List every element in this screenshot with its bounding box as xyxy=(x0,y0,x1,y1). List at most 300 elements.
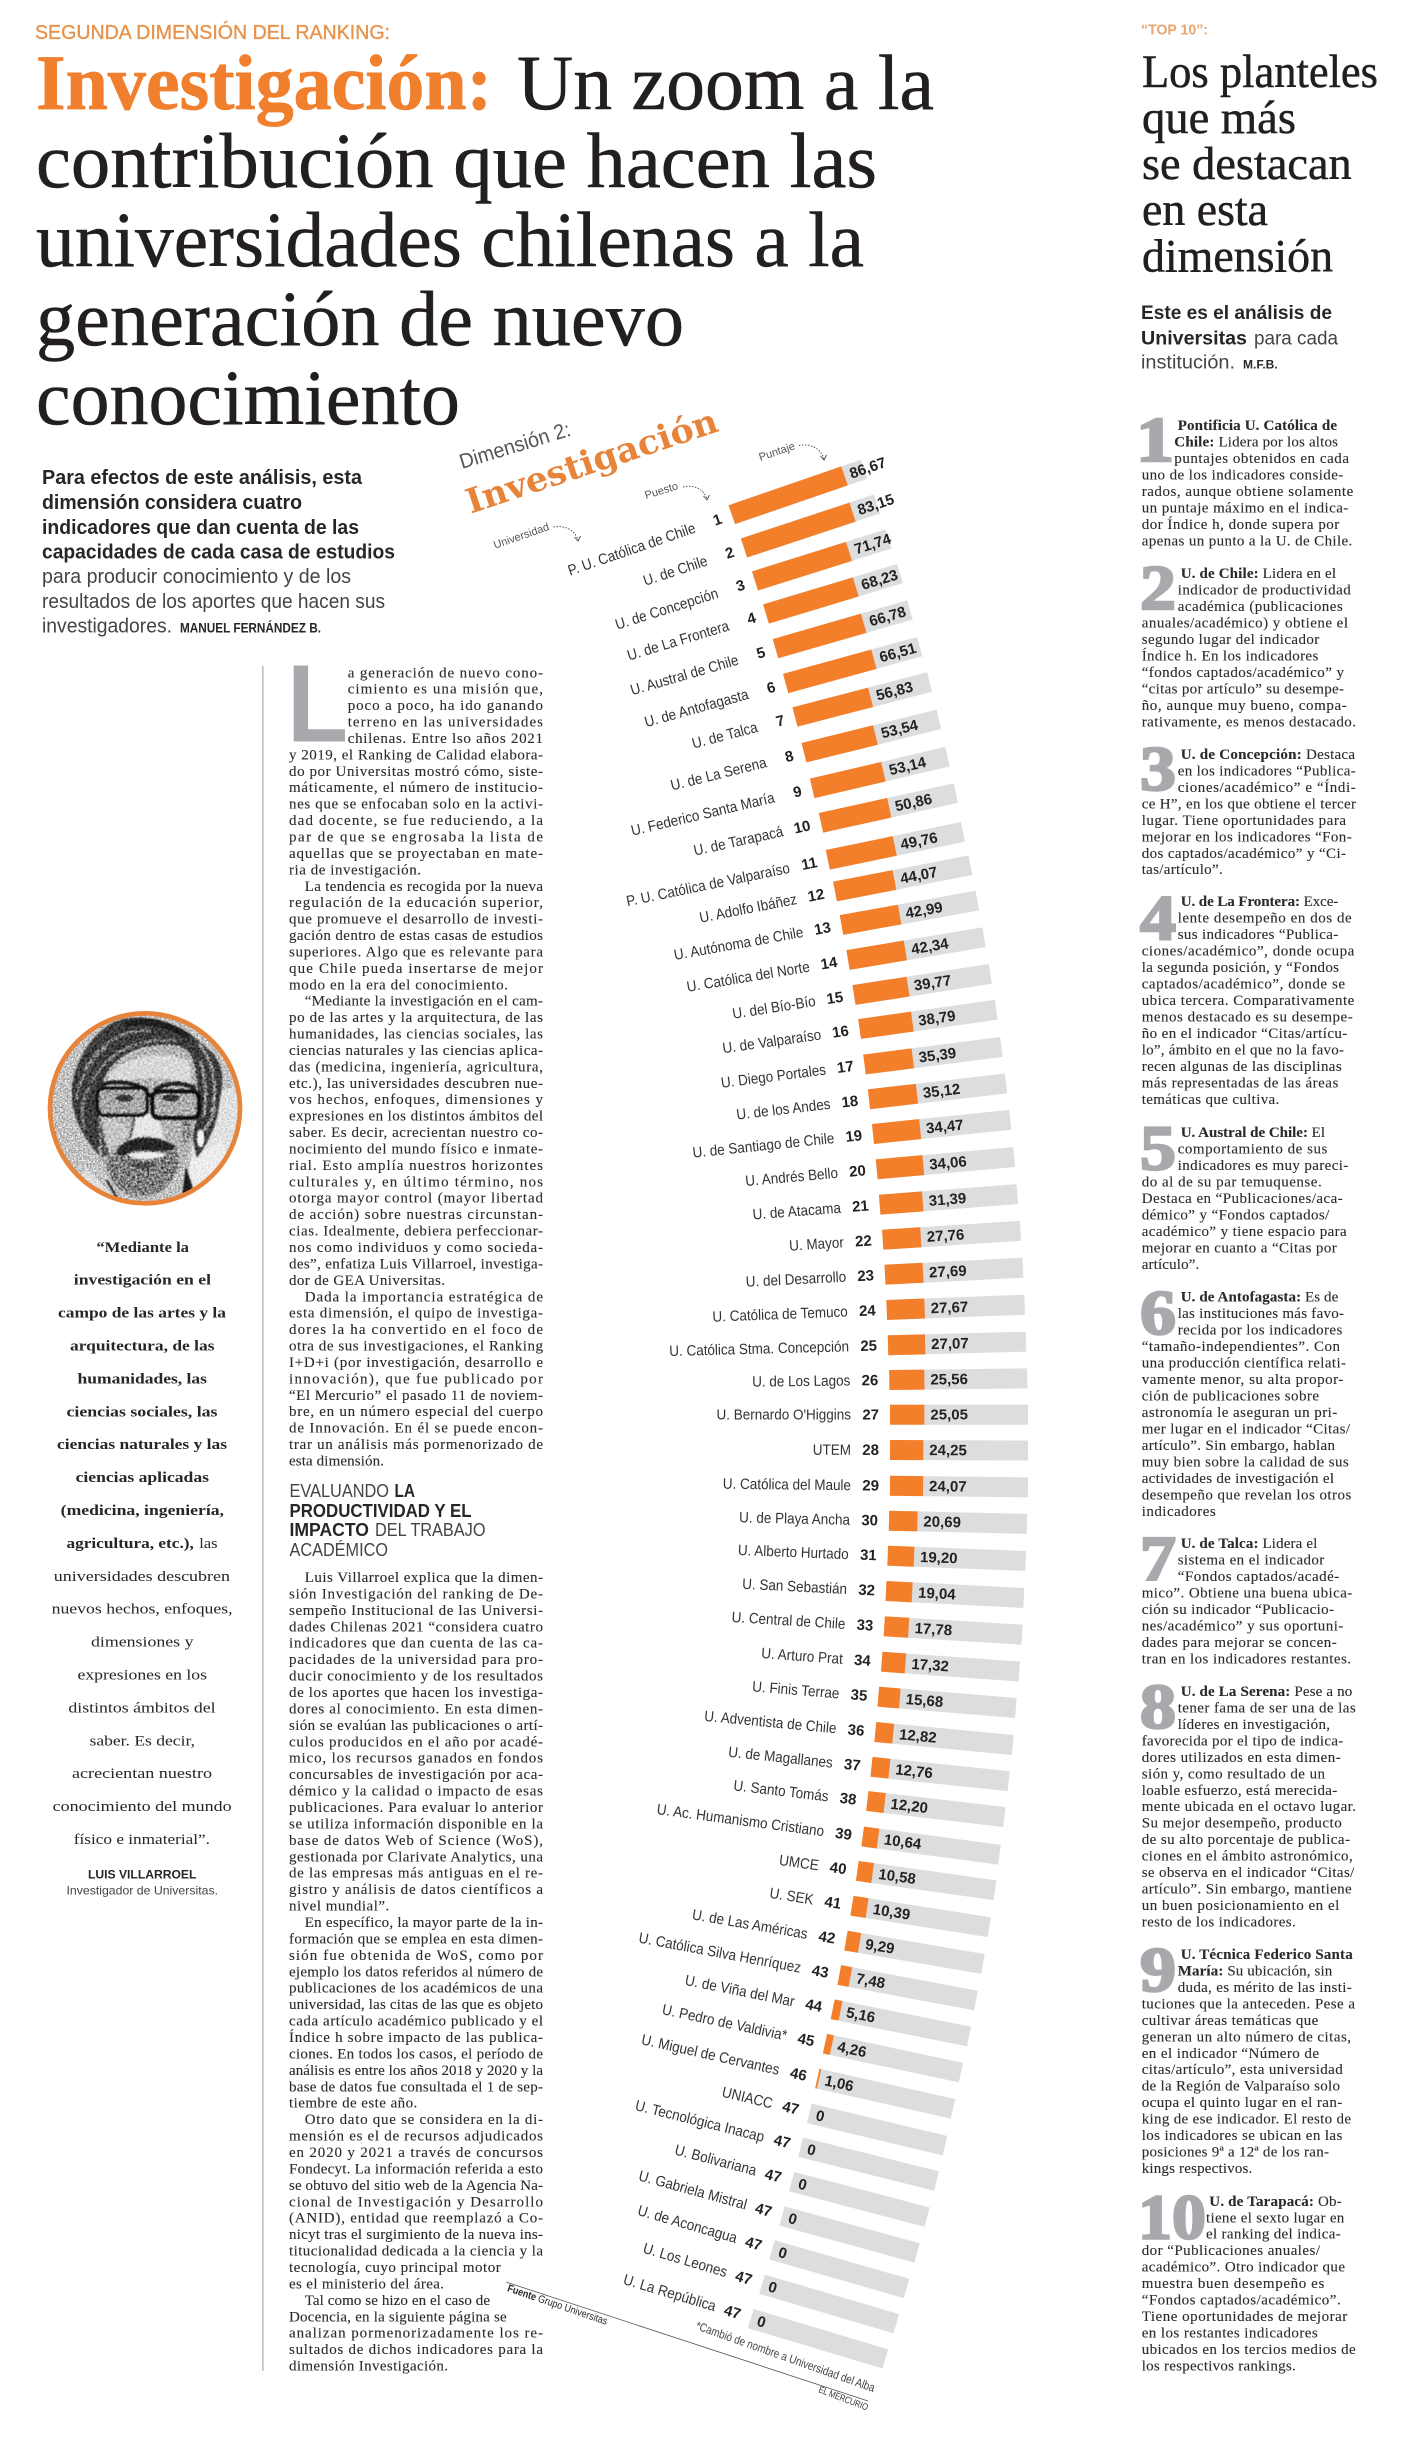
item 3: lugar. Tiene oportunidades para xyxy=(1142,813,1346,829)
item 10: muestra buen desempeño es xyxy=(1142,2276,1324,2292)
row 26 xyxy=(752,1368,1027,1392)
quote attribution: LUIS VILLARROEL xyxy=(88,1867,196,1881)
row 16: U. de Valparaíso xyxy=(721,1027,822,1057)
row 4: 4 xyxy=(745,609,759,628)
row 28: UTEM xyxy=(813,1442,851,1459)
row 20: 34,06 xyxy=(929,1153,967,1174)
item 5: comportamiento de sus xyxy=(1178,1142,1327,1158)
pull quote: nuevos hechos, enfoques, xyxy=(52,1602,233,1618)
row 34: U. Arturo Prat xyxy=(761,1645,843,1668)
row 9: 9 xyxy=(792,783,804,802)
row 8: U. de La Serena xyxy=(669,755,768,795)
row 12: U. Adolfo Ibáñez xyxy=(698,891,798,927)
article text: modo en la era del conocimiento. xyxy=(289,977,508,993)
article text continued: pacidades de la universidad para pro- xyxy=(289,1652,543,1668)
item 4: U. de La Frontera: Exce- xyxy=(1181,894,1338,910)
article text: Dada la importancia estratégica de xyxy=(305,1289,543,1305)
row 2: U. de Chile xyxy=(641,553,710,590)
row 39 xyxy=(656,1799,1001,1865)
row 27: 27 xyxy=(862,1407,879,1424)
item 2: “citas por artículo” su desempe- xyxy=(1142,682,1344,698)
article text: a generación de nuevo cono- xyxy=(348,665,543,681)
row 19: 19 xyxy=(845,1127,863,1146)
item 8: líderes en investigación, xyxy=(1178,1717,1330,1733)
article text: La tendencia es recogida por la nueva xyxy=(305,879,543,895)
row 38 xyxy=(732,1775,1006,1827)
item 3: mejorar en los indicadores “Fon- xyxy=(1142,830,1352,846)
row 34: 17,32 xyxy=(911,1656,949,1675)
item 8: se observa en el indicador “Citas/ xyxy=(1142,1865,1355,1881)
row 17: U. Diego Portales xyxy=(720,1062,827,1092)
row 44: 5,16 xyxy=(845,2004,877,2027)
chart axis captions and arrows: Puesto xyxy=(643,480,680,502)
article text continued: indicadores que dan cuenta de las ca- xyxy=(289,1636,543,1652)
row 30: 20,69 xyxy=(923,1513,961,1531)
item 7: ción su indicador “Publicacio- xyxy=(1142,1602,1334,1618)
row 27: U. Bernardo O'Higgins xyxy=(717,1407,851,1424)
article text: rial. Esto amplía nuestros horizontes xyxy=(289,1158,543,1174)
article text: culturales y, en último término, nos xyxy=(289,1174,543,1190)
item 6: astronomía le aseguran un pri- xyxy=(1142,1405,1337,1421)
article text: “Mediante la investigación en el cam- xyxy=(305,994,543,1010)
item 1: puntajes obtenidos en cada xyxy=(1174,451,1349,467)
row 5: U. Austral de Chile xyxy=(629,652,741,699)
item 9: ocupa el quinto lugar en el ran- xyxy=(1142,2095,1342,2111)
item 1: uno de los indicadores conside- xyxy=(1142,468,1343,484)
item 6: las instituciones más favo- xyxy=(1178,1306,1344,1322)
row 47 Inacap xyxy=(633,2096,939,2191)
row 47 UNIACC: 47 xyxy=(781,2098,801,2119)
row 44 xyxy=(683,1970,971,2046)
row 22: 22 xyxy=(855,1232,872,1250)
row 45: 4,26 xyxy=(836,2039,868,2061)
item 4: recen algunas de las disciplinas xyxy=(1142,1059,1342,1075)
article text: ria de investigación. xyxy=(289,862,421,878)
row 17: 35,39 xyxy=(918,1045,957,1066)
row 34: 34 xyxy=(853,1652,872,1670)
pull quote: “Mediante la xyxy=(96,1240,190,1256)
article text continued: ejemplo los datos referidos al número de xyxy=(289,1964,543,1980)
article text: terreno en las universidades xyxy=(348,715,543,731)
row 42 xyxy=(691,1904,985,1974)
row 19: 34,47 xyxy=(925,1117,964,1137)
article text: otra de sus investigaciones, el Ranking xyxy=(289,1338,544,1354)
item 9: tuciones que la anteceden. Pese a xyxy=(1142,1996,1355,2012)
item 7: nes/académico” y sus oportuni- xyxy=(1142,1618,1343,1634)
intro text: investigadores. xyxy=(42,616,172,638)
item 2: “fondos captados/académico” y xyxy=(1142,665,1344,681)
row 25: U. Católica Stma. Concepción xyxy=(669,1339,849,1360)
row 47 UNIACC xyxy=(720,2083,947,2155)
row 10: 10 xyxy=(792,817,812,838)
row 47 La República: U. La República xyxy=(621,2272,718,2315)
item 8: 8 xyxy=(1140,1671,1176,1742)
row 32: 19,04 xyxy=(918,1585,957,1604)
sidebar heading: se destacan xyxy=(1142,138,1352,190)
row 40: UMCE xyxy=(778,1852,820,1875)
row 17 xyxy=(720,1037,1003,1093)
item 2: segundo lugar del indicador xyxy=(1142,632,1319,648)
row 20 xyxy=(744,1147,1015,1191)
row 10: U. de Tarapacá xyxy=(692,824,785,860)
article text continued xyxy=(289,1570,543,2375)
item 8 xyxy=(1140,1671,1356,1930)
row 12: 12 xyxy=(806,886,826,906)
row 11: P. U. Católica de Valparaíso xyxy=(625,860,792,911)
title: conocimiento xyxy=(36,354,460,441)
row 5 xyxy=(628,600,913,700)
row 28: 24,25 xyxy=(929,1442,967,1459)
intro text: dimensión considera cuatro xyxy=(42,492,302,514)
intro text xyxy=(42,467,395,638)
row 4 xyxy=(625,564,903,665)
row 41: 10,39 xyxy=(872,1901,911,1924)
row 38: 12,20 xyxy=(890,1796,929,1817)
article text continued: dimensión Investigación. xyxy=(289,2359,448,2375)
item 4: menos destacado es su desempe- xyxy=(1142,1010,1353,1026)
row 11 xyxy=(624,822,965,911)
row 43: U. Católica Silva Henríquez xyxy=(637,1930,802,1977)
sidebar heading: dimensión xyxy=(1142,230,1333,282)
row 37 xyxy=(727,1742,1010,1791)
item 8: tener fama de ser una de las xyxy=(1178,1700,1356,1716)
chart footer xyxy=(506,2282,877,2413)
article text continued: Luis Villarroel explica que la dimen- xyxy=(305,1570,543,1586)
item 5: artículo”. xyxy=(1142,1257,1199,1273)
subheading: LA xyxy=(394,1481,415,1501)
item 6: ción de publicaciones sobre xyxy=(1142,1388,1319,1404)
item 6: “tamaño-independientes”. Con xyxy=(1142,1339,1340,1355)
item 9: de la Región de Valparaíso solo xyxy=(1142,2079,1340,2095)
row 39: U. Ac. Humanismo Cristiano xyxy=(656,1801,825,1840)
row 33 xyxy=(731,1607,1023,1645)
item 2: ño, aunque muy bueno, compa- xyxy=(1142,698,1347,714)
item 10: dor “Publicaciones anuales/ xyxy=(1142,2243,1321,2259)
row 45: U. Pedro de Valdivia* xyxy=(661,2002,789,2045)
item 10: “Fondos captados/académico”. xyxy=(1142,2292,1341,2308)
item 5: indicadores es muy pareci- xyxy=(1178,1158,1348,1174)
item 4: lo”, ámbito en el que no la favo- xyxy=(1142,1042,1344,1058)
row 35: 15,68 xyxy=(905,1691,944,1711)
row 7: 56,83 xyxy=(874,679,915,705)
drop cap L: L xyxy=(287,642,348,766)
row 41: 41 xyxy=(823,1894,842,1913)
article text continued: analizan pormenorizadamente los re- xyxy=(289,2326,543,2342)
row 21: 21 xyxy=(851,1198,869,1216)
article text: dores la ha convertido en el foco de xyxy=(289,1322,543,1338)
row 11: 11 xyxy=(800,854,819,874)
row 37: 37 xyxy=(843,1756,861,1775)
chart axis captions and arrows: Puntaje xyxy=(757,440,797,464)
row 26: U. de Los Lagos xyxy=(752,1373,850,1391)
article text continued: gistro y análisis de datos científicos a xyxy=(289,1882,543,1898)
article text continued: cional de Investigación y Desarrollo xyxy=(289,2194,543,2210)
item 10: 10 xyxy=(1138,2182,1206,2253)
row 2: 2 xyxy=(723,544,736,563)
item 6: 6 xyxy=(1140,1277,1176,1348)
row 47 Gabriela Mistral: U. Gabriela Mistral xyxy=(637,2168,749,2214)
row 8 xyxy=(668,710,941,795)
item 10: Tiene oportunidades de mejorar xyxy=(1142,2309,1347,2325)
item 10: tiene el sexto lugar en xyxy=(1206,2210,1345,2226)
item 7 xyxy=(1140,1523,1352,1668)
item 4: lente desempeño en dos de xyxy=(1178,910,1352,926)
pull quote: expresiones en los xyxy=(78,1668,207,1684)
row 35 xyxy=(751,1676,1017,1718)
quote attribution xyxy=(66,1867,218,1898)
row 20: 20 xyxy=(848,1162,867,1181)
intro text: resultados de los aportes que hacen sus xyxy=(42,591,385,613)
title: universidades chilenas a la xyxy=(36,196,864,283)
row 13: 42,99 xyxy=(904,899,944,922)
row 47 Gabriela Mistral: 0 xyxy=(786,2210,799,2229)
item 8: un buen posicionamiento en el xyxy=(1142,1898,1339,1914)
item 9: 9 xyxy=(1140,1934,1176,2005)
row 37: 12,76 xyxy=(894,1761,934,1782)
item 9: king de ese indicador. El resto de xyxy=(1142,2112,1351,2128)
article text continued: de las empresas más antiguas en el re- xyxy=(289,1866,543,1882)
item 6: U. de Antofagasta: Es de xyxy=(1181,1290,1339,1306)
item 10: los respectivos rankings. xyxy=(1142,2358,1296,2374)
article text: cias. Idealmente, debiera perfeccionar- xyxy=(289,1224,543,1240)
article text continued: base de datos Web of Science (WoS), xyxy=(289,1833,543,1849)
item 1: rados, aunque obtiene solamente xyxy=(1142,484,1354,500)
row 33: 33 xyxy=(856,1617,874,1635)
article text: saber. Es decir, acrecientan nuestro co- xyxy=(289,1125,543,1141)
bar chart: ranking xyxy=(565,452,1028,2369)
row 47 Aconcagua: 47 xyxy=(743,2234,764,2255)
row 6: 66,51 xyxy=(878,640,918,666)
subheading: DEL TRABAJO xyxy=(375,1520,486,1540)
title xyxy=(36,39,934,441)
item 1: Chile: Lidera por los altos xyxy=(1174,435,1338,451)
article text continued: gestionada por Clarivate Analytics, una xyxy=(289,1849,543,1865)
subheading: ACADÉMICO xyxy=(290,1540,388,1560)
row 14: 14 xyxy=(819,954,839,973)
item 8: favorecida por el tipo de indica- xyxy=(1142,1733,1343,1749)
row 29: 24,07 xyxy=(929,1478,967,1496)
item 7: dades para mejorar se concen- xyxy=(1142,1635,1337,1651)
row 24 xyxy=(712,1295,1025,1327)
article text: poco a poco, ha ido ganando xyxy=(348,698,543,714)
item 7: U. de Talca: Lidera el xyxy=(1181,1536,1317,1552)
item 2: rativamente, es menos destacado. xyxy=(1142,714,1356,730)
row 44: 44 xyxy=(804,1996,824,2016)
row 16: 38,79 xyxy=(917,1008,957,1030)
row 21 xyxy=(752,1184,1018,1224)
sidebar kicker: “TOP 10”: xyxy=(1141,21,1208,38)
article text continued: publicaciones. Para evaluar lo anterior xyxy=(289,1800,543,1816)
item 5: 5 xyxy=(1140,1112,1176,1184)
row 28 xyxy=(813,1440,1028,1460)
article text continued: mico, los recursos ganados en fondos xyxy=(289,1751,543,1767)
article text: que Chile pueda insertarse de mejor xyxy=(289,961,543,977)
pull quote: investigación en el xyxy=(74,1273,211,1289)
row 12 xyxy=(698,855,972,928)
article text continued: dades Chilenas 2021 “considera cuatro xyxy=(289,1619,543,1635)
article text: trar un análisis más pormenorizado de xyxy=(289,1437,543,1453)
row 33: U. Central de Chile xyxy=(731,1609,846,1633)
item 8: ciones en el ámbito astronómico, xyxy=(1142,1849,1353,1865)
row 12: 44,07 xyxy=(899,864,939,888)
row 47 La República: 0 xyxy=(755,2313,768,2332)
row 40 xyxy=(778,1850,996,1900)
article text: innovación), que fue publicado por xyxy=(289,1371,543,1387)
row 47 Aconcagua xyxy=(635,2202,909,2298)
row 43: 43 xyxy=(810,1962,830,1982)
sidebar heading: Los planteles xyxy=(1142,46,1378,98)
sidebar intro: Universitas xyxy=(1141,328,1247,349)
pull quote: acrecientan nuestro xyxy=(72,1766,212,1782)
article text continued: formación que se emplea en esta dimen- xyxy=(289,1931,543,1947)
pull quote: arquitectura, de las xyxy=(70,1338,215,1354)
row 47 La República xyxy=(620,2271,888,2369)
article text: par de que se engrosaba la lista de xyxy=(289,830,543,846)
row 47 Los Leones: U. Los Leones xyxy=(641,2240,729,2281)
row 8: 8 xyxy=(783,748,795,766)
article text continued: concursables de investigación por aca- xyxy=(289,1767,543,1783)
article text: de acción) sobre nuestras circunstan- xyxy=(289,1207,543,1223)
item 2: académica (publicaciones xyxy=(1178,599,1343,615)
row 3: 71,74 xyxy=(852,530,894,558)
row 36: 36 xyxy=(847,1721,865,1740)
article text continued: universidad, las citas de las que es objeto xyxy=(289,1997,543,2013)
item 9: generan un alto número de citas, xyxy=(1142,2029,1351,2045)
row 41: U. SEK xyxy=(768,1885,815,1909)
row 7: U. de Talca xyxy=(690,719,760,753)
article text: y 2019, el Ranking de Calidad elabora- xyxy=(289,747,543,763)
article text continued: es el ministerio del área. xyxy=(289,2276,444,2292)
row 37: U. de Magallanes xyxy=(727,1744,834,1772)
chart axis captions and arrows: Universidad xyxy=(492,521,551,552)
item 7: 7 xyxy=(1140,1523,1176,1594)
item 10 xyxy=(1138,2182,1356,2374)
row 39: 10,64 xyxy=(883,1831,923,1853)
item 1: apenas un punto a la U. de Chile. xyxy=(1142,534,1352,550)
portrait xyxy=(48,1012,248,1207)
row 1: P. U. Católica de Chile xyxy=(566,520,698,580)
item 1: dor Índice h, donde supera por xyxy=(1142,516,1339,533)
item 5: U. Austral de Chile: El xyxy=(1181,1125,1325,1141)
row 11: 49,76 xyxy=(899,829,939,854)
row 15: 39,77 xyxy=(913,972,952,995)
sidebar intro: para cada xyxy=(1254,328,1338,349)
row 23: 23 xyxy=(857,1267,874,1285)
item 7: tran en los indicadores restantes. xyxy=(1142,1652,1351,1668)
article text continued: se obtuvo del sitio web de la Agencia Na- xyxy=(289,2178,543,2194)
article text: regulación de la educación superior, xyxy=(289,895,543,911)
row 32 xyxy=(742,1574,1024,1608)
row 2 xyxy=(641,489,897,591)
item 6: vamente menor, su alta propor- xyxy=(1142,1372,1343,1388)
sidebar intro: Este es el análisis de xyxy=(1141,303,1332,324)
item 8: U. de La Serena: Pese a no xyxy=(1181,1684,1352,1700)
row 14 xyxy=(685,927,986,997)
title: generación de nuevo xyxy=(36,275,684,362)
article text continued: sión se evalúan las publicaciones o artí- xyxy=(289,1718,543,1734)
row 31 xyxy=(738,1540,1026,1571)
item 6: mer lugar en el indicador “Citas/ xyxy=(1142,1422,1351,1438)
item 7: “Fondos captados/acadé- xyxy=(1178,1569,1339,1585)
item 1: Pontificia U. Católica de xyxy=(1178,418,1337,434)
row 13: 13 xyxy=(813,919,832,939)
item 4: captados/académico”, donde se xyxy=(1142,976,1345,992)
row 42: 9,29 xyxy=(864,1936,896,1958)
row 29: U. Católica del Maule xyxy=(723,1476,851,1494)
pull quote: físico e inmaterial”. xyxy=(74,1832,210,1848)
article text: dor de GEA Universitas. xyxy=(289,1273,445,1289)
row 8: 53,54 xyxy=(879,717,921,742)
row 9: 53,14 xyxy=(887,754,928,779)
article text: humanidades, las ciencias sociales, las xyxy=(289,1026,543,1042)
pull quote: dimensiones y xyxy=(91,1635,194,1651)
article text continued: dores al conocimiento. En esta dimen- xyxy=(289,1701,543,1717)
item 4: sus indicadores “Publica- xyxy=(1178,927,1338,943)
row 38: U. Santo Tomás xyxy=(732,1778,829,1806)
row 46 xyxy=(640,2030,955,2119)
item 1: un puntaje máximo en el indica- xyxy=(1142,501,1348,517)
row 15: U. del Bío-Bío xyxy=(731,993,817,1023)
title: Un zoom a la xyxy=(517,39,934,126)
item 2 xyxy=(1140,552,1356,730)
row 47 Inacap: 0 xyxy=(805,2141,818,2160)
row 32: 32 xyxy=(858,1582,875,1599)
article text continued: (ANID), entidad que reemplazó a Co- xyxy=(289,2211,543,2227)
article text continued: nivel mundial”. xyxy=(289,1899,389,1915)
row 47 UNIACC: 0 xyxy=(814,2107,826,2126)
item 9: María: Su ubicación, sin xyxy=(1178,1964,1333,1980)
article text continued: sión Investigación del ranking de De- xyxy=(289,1586,543,1602)
row 35: 35 xyxy=(850,1686,868,1705)
row 1 xyxy=(565,452,889,580)
article text continued: cada artículo académico publicado y el xyxy=(289,2014,543,2030)
item 7: mico”. Obtiene una buena ubica- xyxy=(1142,1586,1352,1602)
sidebar heading xyxy=(1142,46,1378,282)
item 8: mente ubicada en el octavo lugar. xyxy=(1142,1799,1356,1815)
sidebar intro: M.F.B. xyxy=(1243,358,1278,372)
item 4: ciones/académico”, donde ocupa xyxy=(1142,944,1355,960)
row 2: 83,15 xyxy=(855,491,896,519)
intro text: indicadores que dan cuenta de las xyxy=(42,517,359,539)
article text continued: Fondecyt. La información referida a esto xyxy=(289,2161,543,2177)
row 44: U. de Viña del Mar xyxy=(683,1972,796,2011)
article text: nos como individuos y como socieda- xyxy=(289,1240,543,1256)
title: Investigación: xyxy=(36,39,492,126)
row 47 Los Leones xyxy=(640,2240,899,2333)
intro text: Para efectos de este análisis, esta xyxy=(42,467,363,489)
row 22 xyxy=(789,1221,1021,1256)
row 47 Bolivariana: 47 xyxy=(763,2166,783,2187)
row 16 xyxy=(721,1000,998,1058)
row 23: U. del Desarrollo xyxy=(745,1269,847,1291)
row 36: U. Adventista de Chile xyxy=(704,1708,837,1737)
row 23: 27,69 xyxy=(929,1263,967,1281)
article text: otorga mayor control (mayor libertad xyxy=(289,1191,544,1207)
item 8: artículo”. Sin embargo, mantiene xyxy=(1142,1882,1352,1898)
article text continued: Índice h sobre impacto de las publica- xyxy=(289,2029,543,2046)
article text: aquellas que se proyectaban en mate- xyxy=(289,846,543,862)
item 9 xyxy=(1140,1934,1355,2177)
row 35: U. Finis Terrae xyxy=(752,1679,840,1703)
row 41 xyxy=(768,1883,991,1937)
row 23 xyxy=(745,1258,1023,1292)
row 42: U. de Las Américas xyxy=(691,1907,809,1943)
row 34 xyxy=(761,1643,1020,1682)
subheading: IMPACTO xyxy=(290,1520,369,1540)
chart axis captions and arrows xyxy=(492,440,826,552)
row 47 Los Leones: 47 xyxy=(733,2268,754,2289)
row 27 xyxy=(717,1405,1028,1425)
